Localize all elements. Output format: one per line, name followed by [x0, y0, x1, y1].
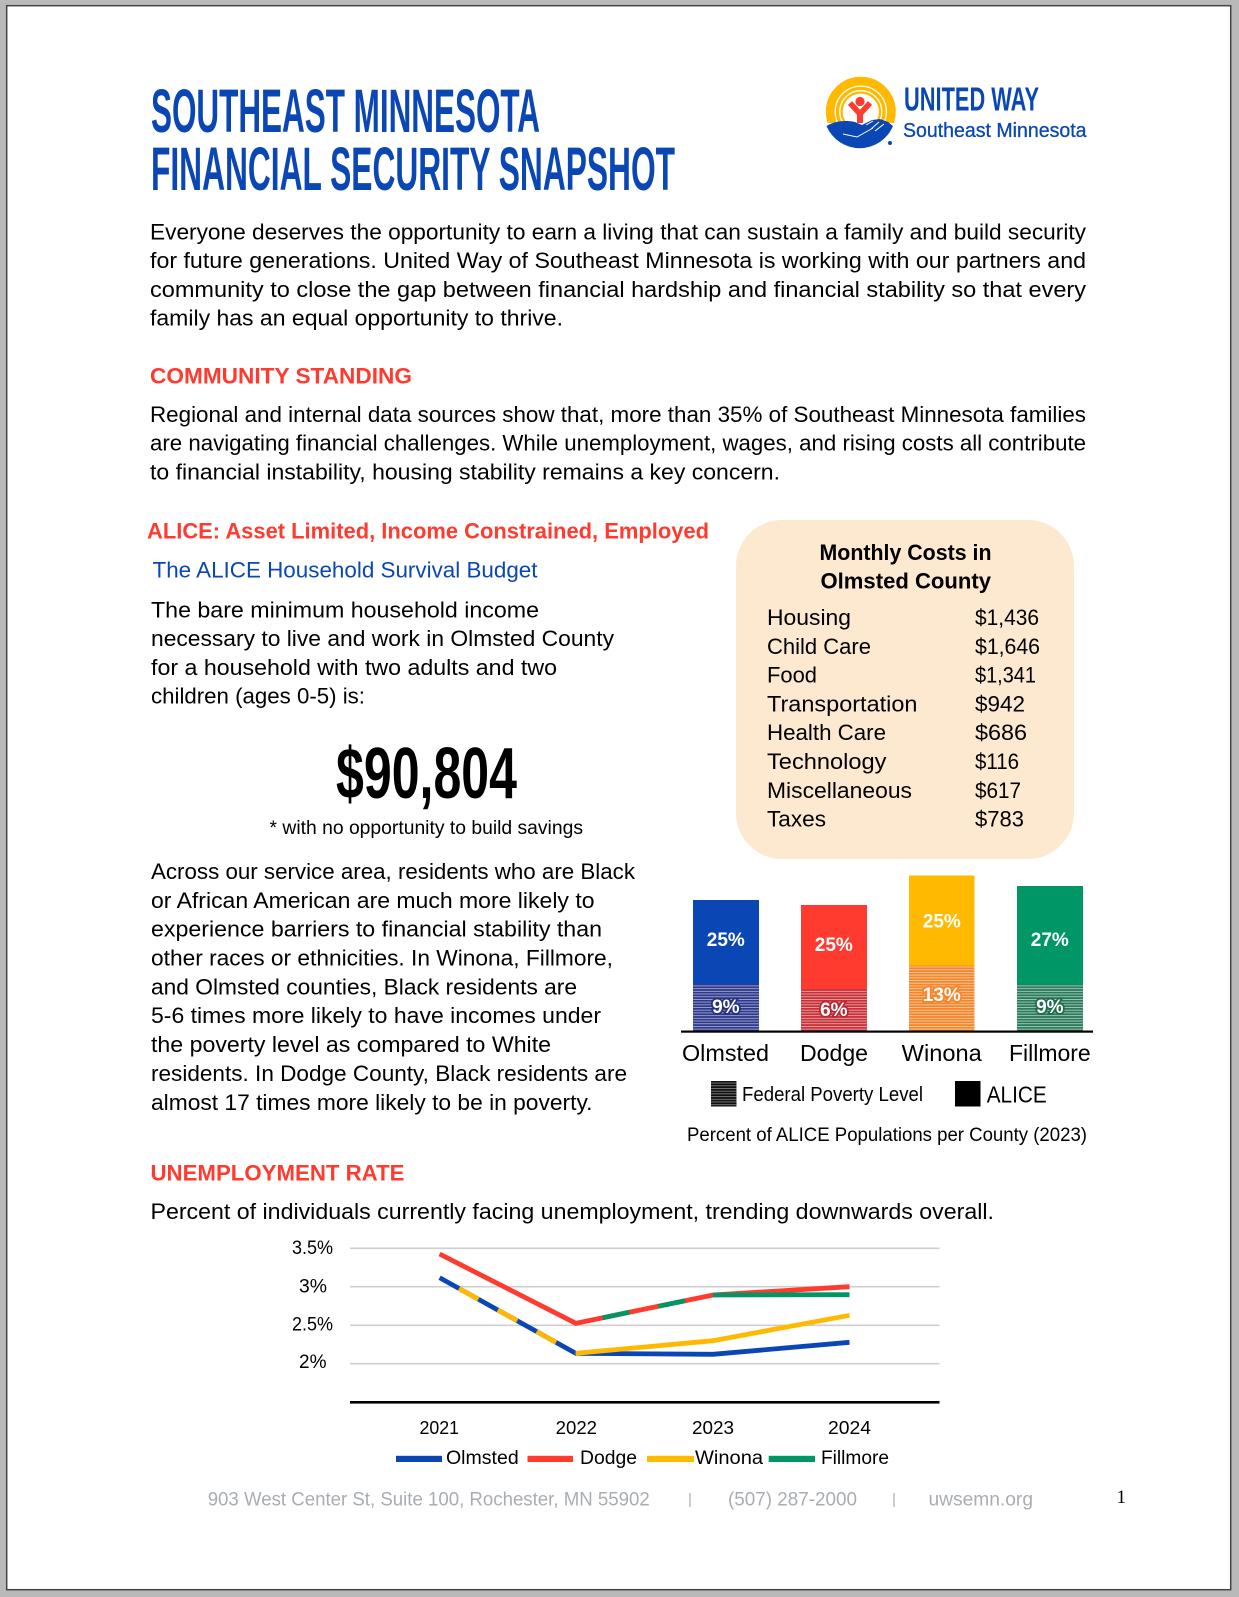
- barriers paragraph: experience barriers to financial stability than: [151, 916, 602, 942]
- bar: Dodge: [801, 905, 867, 1031]
- cost values: [975, 605, 1040, 832]
- bar: Fillmore: 27%: [1031, 930, 1069, 951]
- panel: monthly costs: [736, 520, 1074, 859]
- cost values: $1,341: [975, 663, 1036, 688]
- cost labels: Taxes: [767, 807, 826, 832]
- legend: federal poverty level: Federal Poverty Level: [742, 1084, 923, 1106]
- survival budget description: [151, 598, 614, 708]
- line: Dodge: [440, 1254, 850, 1323]
- unemployment description: Percent of individuals currently facing unemployment, trending downwards overall.: [150, 1199, 994, 1224]
- heading: unemployment rate: UNEMPLOYMENT RATE: [150, 1160, 404, 1186]
- cost values: $1,646: [975, 634, 1040, 659]
- line: Fillmore: [603, 1295, 850, 1318]
- cost values: $1,436: [975, 605, 1039, 630]
- chart caption: Percent of ALICE Populations per County (2023): [687, 1125, 1087, 1146]
- cost labels: Miscellaneous: [767, 778, 912, 803]
- logo wordmark: UNITED WAY: [904, 81, 1039, 118]
- cost labels: Food: [767, 663, 817, 688]
- intro paragraph: community to close the gap between financial hardship and financial stability so that every: [150, 277, 1086, 302]
- cost labels: [767, 605, 918, 832]
- footer contact line: [208, 1490, 1033, 1510]
- y axis labels: 2%: [299, 1352, 327, 1373]
- footer contact line: |: [892, 1491, 896, 1508]
- title: SOUTHEAST MINNESOTA: [151, 77, 540, 145]
- panel heading: Olmsted County: [820, 568, 992, 594]
- footer contact line: uwsemn.org: [928, 1490, 1033, 1510]
- legend: line chart: [396, 1448, 889, 1469]
- county labels: Fillmore: [1009, 1040, 1091, 1066]
- footer contact line: (507) 287-2000: [728, 1490, 857, 1510]
- chart axis: [681, 1030, 1093, 1033]
- logo wordmark: Southeast Minnesota: [903, 120, 1087, 142]
- county labels: [682, 1040, 1091, 1066]
- y axis labels: [292, 1238, 333, 1373]
- cost values: $942: [975, 691, 1025, 716]
- legend: line chart: Fillmore: [821, 1448, 889, 1469]
- barriers paragraph: residents. In Dodge County, Black residents are: [151, 1061, 627, 1086]
- title: FINANCIAL SECURITY SNAPSHOT: [151, 135, 675, 203]
- intro paragraph: for future generations. United Way of Southeast Minnesota is working with our partners and: [150, 248, 1086, 273]
- survival budget description: for a household with two adults and two: [151, 655, 557, 680]
- line chart: unemployment rate: [292, 1238, 940, 1469]
- line: Olmsted: [440, 1278, 850, 1354]
- community standing paragraph: are navigating financial challenges. While unemployment, wages, and rising costs all contribute: [150, 430, 1086, 456]
- intro paragraph: Everyone deserves the opportunity to earn a living that can sustain a family and build security: [150, 220, 1086, 244]
- cost labels: Health Care: [767, 720, 886, 745]
- barriers paragraph: Across our service area, residents who are Black: [151, 859, 636, 884]
- barriers paragraph: other races or ethnicities. In Winona, Fillmore,: [151, 946, 613, 970]
- subheading: survival budget: The ALICE Household Survival Budget: [152, 558, 538, 582]
- community standing paragraph: [150, 402, 1086, 484]
- county labels: Olmsted: [682, 1040, 769, 1066]
- footnote: * with no opportunity to build savings: [270, 818, 583, 839]
- barriers paragraph: and Olmsted counties, Black residents are: [151, 974, 577, 1000]
- community standing paragraph: Regional and internal data sources show that, more than 35% of Southeast Minnesota families: [150, 402, 1086, 427]
- cost labels: Technology: [767, 749, 886, 774]
- line: Winona: [440, 1278, 850, 1353]
- barriers paragraph: or African American are much more likely to: [151, 888, 594, 913]
- bar: Dodge: 6%: [820, 1000, 848, 1021]
- heading: community standing: COMMUNITY STANDING: [150, 364, 412, 388]
- icon: rainbow hand and figure: [826, 81, 893, 148]
- barriers paragraph: [151, 859, 636, 1115]
- barriers paragraph: almost 17 times more likely to be in poverty.: [151, 1090, 592, 1115]
- survival budget description: necessary to live and work in Olmsted County: [151, 626, 614, 651]
- grid lines: [350, 1248, 940, 1364]
- title: [151, 77, 675, 203]
- legend: line chart: Winona: [695, 1448, 763, 1469]
- cost labels: Child Care: [767, 634, 871, 659]
- intro paragraph: [150, 220, 1086, 330]
- bar: Olmsted: [693, 900, 759, 1031]
- x axis labels: 2024: [828, 1418, 871, 1438]
- cost values: $617: [975, 778, 1021, 803]
- cost labels: Housing: [767, 605, 851, 630]
- bar: Fillmore: [1017, 886, 1083, 1031]
- legend: line chart: Olmsted: [446, 1448, 519, 1469]
- y axis labels: 3%: [299, 1276, 327, 1298]
- heading: ALICE definition: ALICE: Asset Limited, Income Constrained, Employed: [147, 518, 709, 544]
- legend: ALICE: [955, 1081, 1047, 1108]
- bar: Winona: 13%: [923, 985, 961, 1006]
- panel heading: [820, 540, 992, 594]
- cost labels: Transportation: [767, 691, 918, 716]
- survival budget description: The bare minimum household income: [151, 598, 539, 622]
- cost values: $783: [975, 807, 1024, 832]
- bar: Winona: 25%: [923, 912, 961, 932]
- bar: Olmsted: 25%: [707, 930, 745, 951]
- x axis: [350, 1401, 940, 1404]
- logo: United Way Southeast Minnesota: [826, 81, 1087, 148]
- x axis labels: [420, 1418, 871, 1438]
- intro paragraph: family has an equal opportunity to thrive.: [150, 306, 563, 330]
- county labels: Winona: [902, 1040, 982, 1066]
- bar chart: ALICE by county: [681, 876, 1093, 1146]
- x axis labels: 2023: [692, 1418, 734, 1438]
- barriers paragraph: the poverty level as compared to White: [151, 1032, 551, 1057]
- logo wordmark: [903, 81, 1087, 142]
- x axis labels: 2022: [556, 1418, 597, 1438]
- legend: ALICE: ALICE: [987, 1082, 1047, 1108]
- bar: Fillmore: 9%: [1036, 997, 1064, 1018]
- page number: 1: [1116, 1487, 1126, 1508]
- footer contact line: |: [688, 1491, 692, 1508]
- cost values: $116: [975, 749, 1019, 774]
- legend: line chart: Dodge: [580, 1448, 637, 1469]
- barriers paragraph: 5-6 times more likely to have incomes under: [151, 1003, 601, 1028]
- y axis labels: 3.5%: [292, 1238, 333, 1259]
- cost values: $686: [975, 720, 1027, 745]
- survival budget description: children (ages 0-5) is:: [151, 684, 365, 708]
- community standing paragraph: to financial instability, housing stability remains a key concern.: [150, 460, 780, 484]
- footer contact line: 903 West Center St, Suite 100, Rochester, MN 55902: [208, 1490, 650, 1510]
- county labels: Dodge: [800, 1040, 868, 1066]
- legend: federal poverty level: [711, 1081, 923, 1106]
- x axis labels: 2021: [420, 1418, 459, 1438]
- y axis labels: 2.5%: [292, 1314, 333, 1336]
- panel heading: Monthly Costs in: [820, 540, 992, 565]
- big number: survival budget: $90,804: [336, 734, 517, 814]
- bar: Dodge: 25%: [815, 935, 853, 956]
- bar: Olmsted: 9%: [712, 997, 740, 1018]
- bar: Winona: [909, 876, 974, 1031]
